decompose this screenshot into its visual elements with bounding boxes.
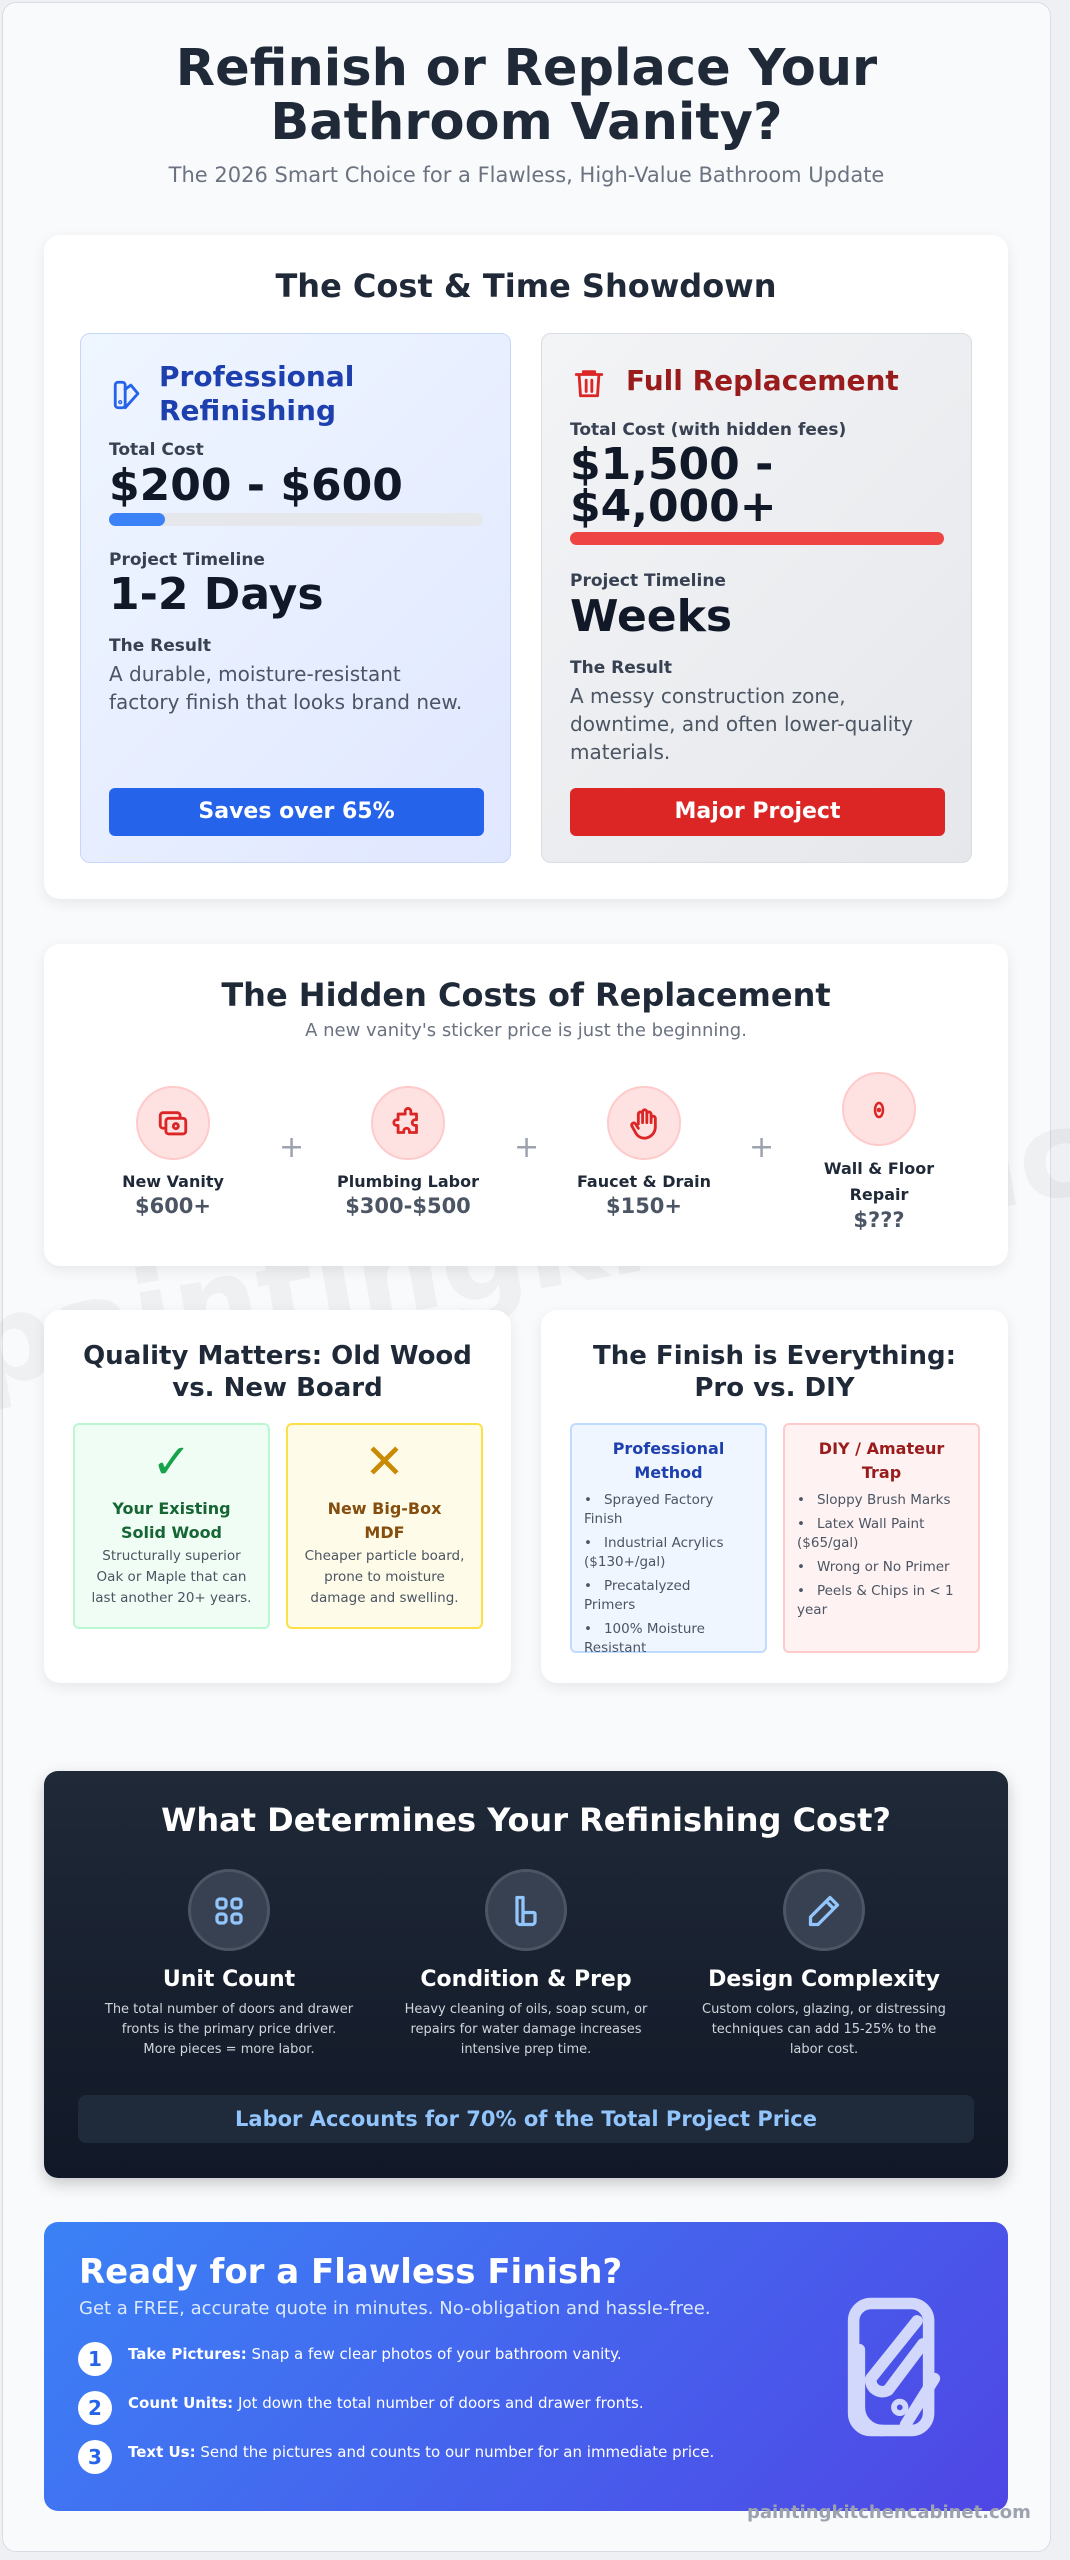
item: new vanity (122, 1086, 224, 1218)
heading: Ready for a Flawless Finish? (79, 2252, 622, 2292)
box: solid wood: Oak or Maple that can (97, 1569, 246, 1585)
factor: condition (405, 1869, 648, 2057)
heading (159, 360, 354, 427)
heading: The Hidden Costs of Replacement (221, 976, 831, 1014)
box: professional: Method (634, 1463, 703, 1482)
factor: unit count (104, 1869, 354, 2057)
icon: swatch (114, 380, 140, 410)
factor: condition: repairs for water damage increases (410, 2022, 642, 2037)
box: solid wood: Solid Wood (121, 1523, 222, 1542)
heading: The Finish is Everything: (593, 1341, 956, 1371)
panel: professional refinishing: factory finish that looks brand new. (109, 690, 462, 714)
box: diy: ($65/gal) (797, 1535, 858, 1551)
icon: cash (136, 1086, 210, 1160)
step 1 (78, 2342, 622, 2376)
box: professional: Precatalyzed (604, 1578, 690, 1594)
callout bar (78, 2095, 974, 2143)
step 1: Take Pictures: Snap a few clear photos of your bathroom vanity. (128, 2345, 622, 2363)
footer url: paintingkitchencabinet.com (747, 2502, 1031, 2523)
panel: finish is everything (541, 1310, 1008, 1683)
box: solid wood (73, 1423, 270, 1629)
box: mdf (286, 1423, 483, 1629)
panel: professional refinishing: 1-2 Days (109, 569, 324, 620)
plus: + (749, 1130, 774, 1165)
panel: professional refinishing (80, 333, 511, 863)
item: wall & floor: Wall & Floor (824, 1159, 934, 1178)
box: diy: Trap (862, 1463, 901, 1482)
panel: full replacement: downtime, and often lower-quality (570, 712, 913, 736)
heading: Quality Matters: Old Wood (83, 1341, 472, 1371)
icon: x: ✕ (364, 1434, 405, 1490)
box: professional: ($130+/gal) (584, 1554, 665, 1570)
plus: + (279, 1130, 304, 1165)
button (109, 788, 484, 836)
box: solid wood: Your Existing (112, 1499, 231, 1518)
heading: vs. New Board (172, 1373, 383, 1403)
panel: CTA (44, 2222, 1008, 2511)
total cost: Total Cost (with hidden fees) (570, 420, 846, 440)
factor: unit count: The total number of doors and drawer (105, 2002, 353, 2017)
box: diy: Wrong or No Primer (817, 1559, 950, 1575)
factor: design: labor cost. (790, 2042, 858, 2057)
timeline: Project Timeline (570, 571, 726, 591)
heading: Professional (159, 360, 354, 393)
box: diy: Latex Wall Paint (817, 1516, 924, 1532)
icon: drop (842, 1072, 916, 1146)
box: solid wood: last another 20+ years. (92, 1590, 251, 1606)
factor: design: Design Complexity (708, 1967, 940, 1992)
box: professional: Primers (584, 1597, 635, 1613)
box: professional: Industrial Acrylics (604, 1535, 724, 1551)
panel: professional refinishing: $200 - $600 (109, 460, 403, 511)
heading (83, 1341, 472, 1403)
panel: professional refinishing: A durable, moisture-resistant (109, 662, 401, 686)
box: professional: Finish (584, 1511, 622, 1527)
subtitle: A new vanity's sticker price is just the beginning. (305, 1020, 747, 1041)
heading: Full Replacement (626, 364, 899, 397)
icon: phone/paperclip (848, 2298, 940, 2436)
step 1: 1 (88, 2347, 102, 2371)
progress bar (570, 532, 944, 545)
icon: grid (188, 1869, 270, 1951)
panel: full replacement: A messy construction zone, (570, 684, 846, 708)
timeline: Project Timeline (109, 550, 265, 570)
item: plumbing: Plumbing Labor (337, 1172, 479, 1191)
factor: design: techniques can add 15-25% to the (712, 2022, 936, 2037)
item: wall & floor (824, 1072, 934, 1232)
panel: full replacement: $4,000+ (570, 481, 777, 532)
box: diy: Peels & Chips in < 1 (817, 1583, 954, 1599)
step 2 (78, 2391, 644, 2425)
step 2: 2 (88, 2396, 102, 2420)
box: professional (570, 1423, 767, 1653)
box: solid wood: Structurally superior (102, 1548, 241, 1564)
item: faucet (577, 1086, 711, 1218)
icon: pencil (783, 1869, 865, 1951)
panel: what determines cost (44, 1771, 1008, 2178)
box: professional: Professional (613, 1439, 724, 1458)
icon: trash (574, 370, 604, 398)
item: plumbing (337, 1086, 479, 1218)
step 3: 3 (88, 2445, 102, 2469)
box: mdf: prone to moisture (324, 1569, 445, 1585)
steps (78, 2342, 714, 2474)
factor: unit count: Unit Count (163, 1967, 295, 1992)
box: diy: DIY / Amateur (819, 1439, 944, 1458)
box: diy: Sloppy Brush Marks (817, 1492, 951, 1508)
title: Refinish or Replace Your (176, 39, 877, 98)
box: mdf: Cheaper particle board, (305, 1548, 464, 1564)
panel: full replacement (541, 333, 972, 863)
panel: full replacement: materials. (570, 740, 670, 764)
item: faucet: Faucet & Drain (577, 1172, 711, 1191)
step 3 (78, 2440, 714, 2474)
button (570, 788, 945, 836)
result: The Result (570, 658, 672, 678)
subtitle: Get a FREE, accurate quote in minutes. No-obligation and hassle-free. (79, 2298, 711, 2319)
icon: puzzle (371, 1086, 445, 1160)
factor: design: Custom colors, glazing, or distressing (702, 2002, 946, 2017)
box: professional: Sprayed Factory (604, 1492, 713, 1508)
step 2: Count Units: Jot down the total number of doors and drawer fronts. (128, 2394, 644, 2412)
factor: condition: Condition & Prep (420, 1967, 632, 1992)
icon: check: ✓ (151, 1434, 192, 1490)
panel: full replacement: Weeks (570, 591, 732, 642)
plus: + (514, 1130, 539, 1165)
box: professional: Resistant (584, 1640, 646, 1656)
title: Bathroom Vanity? (270, 93, 783, 152)
panel: quality matters (44, 1310, 511, 1683)
result: The Result (109, 636, 211, 656)
box: mdf: damage and swelling. (310, 1590, 459, 1606)
factor: unit count: fronts is the primary price driver. (122, 2022, 336, 2037)
box: diy (783, 1423, 980, 1653)
panel: cost & time showdown (44, 235, 1008, 899)
button: Saves over 65% (198, 799, 395, 824)
item: wall & floor: $??? (853, 1208, 905, 1232)
heading: What Determines Your Refinishing Cost? (161, 1801, 891, 1839)
factor: design (702, 1869, 946, 2057)
box: professional: 100% Moisture (604, 1621, 705, 1637)
total cost: Total Cost (109, 440, 204, 460)
step 3: Text Us: Send the pictures and counts to our number for an immediate price. (128, 2443, 714, 2461)
heading (593, 1341, 956, 1403)
subtitle: The 2026 Smart Choice for a Flawless, High-Value Bathroom Update (169, 163, 884, 187)
title (176, 39, 877, 152)
factor: unit count: More pieces = more labor. (143, 2042, 315, 2057)
item: plumbing: $300-$500 (345, 1194, 471, 1218)
callout bar: Labor Accounts for 70% of the Total Project Price (235, 2107, 817, 2131)
panel: hidden costs (44, 944, 1008, 1266)
box: diy: year (797, 1602, 827, 1618)
heading: Refinishing (159, 394, 336, 427)
button: Major Project (674, 799, 840, 824)
factor: condition: Heavy cleaning of oils, soap scum, or (405, 2002, 647, 2017)
heading: The Cost & Time Showdown (275, 267, 777, 305)
icon: hand (607, 1086, 681, 1160)
heading: Pro vs. DIY (694, 1373, 855, 1403)
progress bar (109, 513, 483, 526)
factor: condition: intensive prep time. (461, 2042, 591, 2057)
item: faucet: $150+ (606, 1194, 682, 1218)
item: new vanity: $600+ (135, 1194, 211, 1218)
box: mdf: MDF (364, 1523, 405, 1542)
panel: full replacement: $1,500 - (570, 439, 773, 490)
box: mdf: New Big-Box (328, 1499, 441, 1518)
icon: bucket (485, 1869, 567, 1951)
item: new vanity: New Vanity (122, 1172, 224, 1191)
item: wall & floor: Repair (850, 1185, 908, 1204)
